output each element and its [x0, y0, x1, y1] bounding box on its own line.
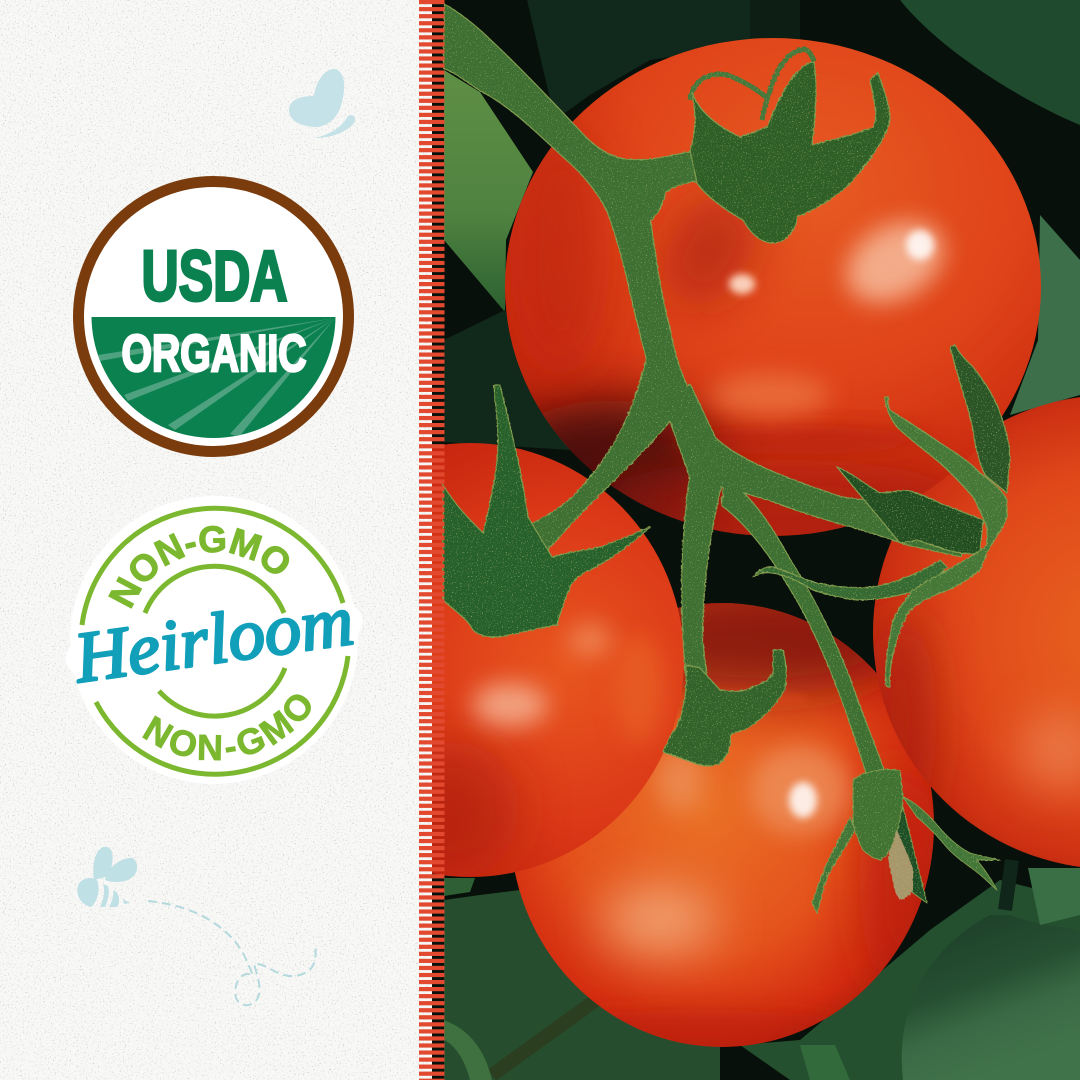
dark foliage backdrop	[432, 0, 1080, 1080]
tomato: right	[864, 395, 1080, 869]
badge: USDA Organic	[78, 182, 348, 452]
calyx: lower stem end	[812, 769, 1000, 913]
NON-GMO top text: NON-GMO	[108, 526, 290, 609]
outer and inner rings	[82, 508, 348, 774]
sepal: upright	[950, 345, 1010, 493]
badge ring	[78, 182, 348, 452]
bee	[77, 847, 137, 907]
tomato: left	[432, 443, 684, 877]
icon: butterfly	[289, 69, 355, 138]
calyx: left tomato	[443, 385, 650, 637]
sepal: middle dark	[837, 467, 983, 554]
sepal: curling	[885, 397, 1007, 687]
calyx: top tomato	[690, 49, 890, 243]
main sepal	[853, 769, 903, 860]
tomato: bottom	[514, 603, 934, 1047]
badge backing	[59, 496, 369, 784]
sepal hooks	[690, 49, 814, 120]
icon: bee with dashed flight trail	[77, 847, 316, 1005]
NON-GMO bottom text: NON-GMO	[142, 694, 311, 760]
sepal: long left	[753, 560, 947, 600]
sepal body	[690, 62, 890, 243]
leaves	[444, 0, 1080, 1080]
thin left sepal	[812, 817, 855, 913]
photo: tomatoes on the vine	[432, 0, 1080, 1080]
flight trail	[148, 901, 316, 1005]
badge: Non-GMO Heirloom	[66, 496, 362, 784]
calyx: right tomato	[753, 345, 1010, 687]
dark sepal	[890, 807, 927, 903]
right sepal	[903, 797, 1000, 890]
green field	[85, 317, 345, 442]
calyx: bottom tomato stem end	[663, 650, 786, 766]
Heirloom script text: Heirloom	[69, 580, 358, 698]
red stripe border	[419, 0, 444, 1080]
ORGANIC text: ORGANIC	[122, 325, 306, 383]
USDA text: USDA	[142, 238, 288, 316]
panel: fabric background	[0, 0, 432, 1080]
dried blossom	[888, 830, 913, 900]
tomato: top	[495, 38, 1041, 540]
vine stems	[444, 5, 975, 774]
